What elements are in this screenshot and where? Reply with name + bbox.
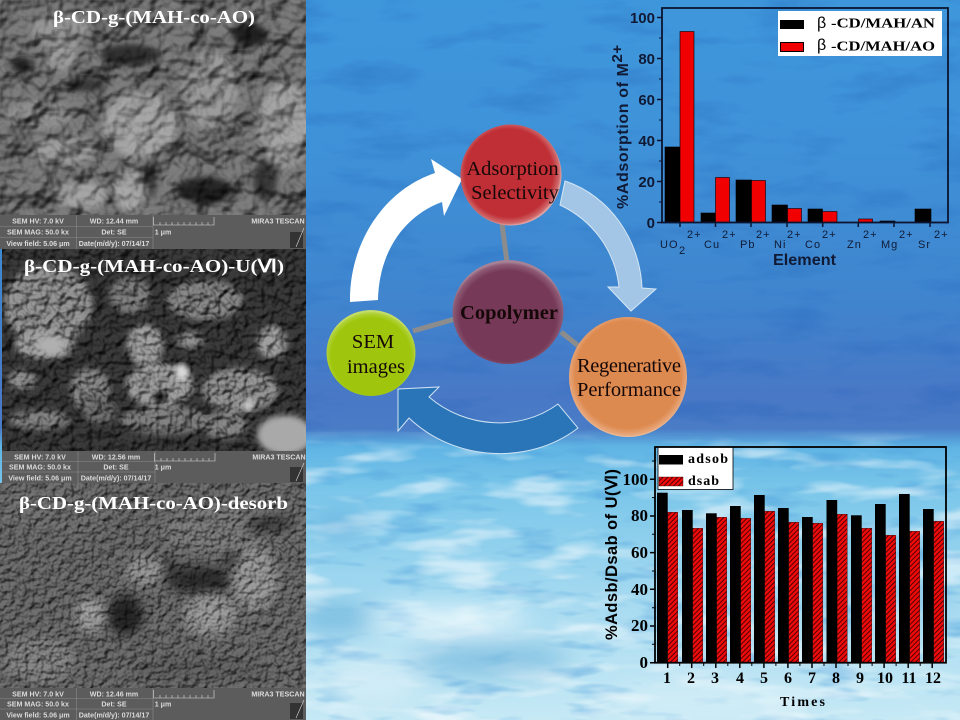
node: Regenerative Performance: Regenerative (577, 355, 681, 377)
SEM 3 title: β-CD-g-(MAH-co-AO)-desorb (19, 493, 288, 514)
chart 1 x axis title: Element (773, 252, 837, 269)
chart 1 legend: -CD/MAH/AO (831, 40, 935, 54)
SEM 1 info bar: SEM HV: 7.0 kV (12, 218, 64, 226)
SEM 1 info bar: WD: 12.44 mm (90, 218, 138, 226)
node: Copolymer: Copolymer (460, 302, 558, 324)
chart 1 y axis labels: 0 (647, 215, 655, 232)
chart 1 x axis labels (660, 229, 949, 257)
SEM 1 info bar: View field: 5.06 μm (6, 240, 70, 248)
SEM 2 info bar: SEM MAG: 50.0 kx (9, 464, 71, 472)
chart 1 y axis labels: 80 (638, 51, 655, 68)
SEM 2 info bar: WD: 12.56 mm (92, 454, 140, 462)
SEM 2 info bar: SEM HV: 7.0 kV (14, 454, 66, 462)
chart 2 x axis labels: 5 (760, 670, 768, 687)
chart 1 y axis labels (630, 10, 655, 232)
SEM 2 title: β-CD-g-(MAH-co-AO)-U(Ⅵ) (24, 256, 284, 277)
chart 1 x axis labels: 2 (679, 245, 686, 257)
SEM 2 info bar (2, 451, 306, 483)
chart 2 x axis labels (663, 670, 941, 687)
chart 1 legend: -CD/MAH/AN (831, 16, 935, 32)
node: SEM images: images (347, 356, 405, 378)
chart 2 y axis labels: 60 (631, 543, 648, 562)
chart 1 x axis labels: Sr (918, 239, 931, 251)
SEM 1 info bar: Date(m/d/y): 07/14/17 (79, 240, 149, 248)
SEM 3 info bar: Date(m/d/y): 07/14/17 (79, 712, 149, 720)
SEM 1 info bar: MIRA3 TESCAN (251, 218, 305, 226)
chart 1 x axis labels: 2+ (722, 229, 737, 241)
panel: SEM image 1 (0, 0, 311, 249)
arrow: adsorption selectivity to regenerative performance (560, 181, 656, 311)
SEM 2 info bar: View field: 5.06 μm (8, 474, 72, 482)
chart 2 x axis labels: 1 (663, 670, 671, 687)
chart 1 x axis labels: 2+ (863, 229, 878, 241)
panel: SEM image 2 (2, 249, 313, 483)
chart 2 x axis labels: 9 (856, 670, 864, 687)
chart 1 legend (778, 11, 942, 56)
SEM 3 info bar: SEM HV: 7.0 kV (12, 690, 64, 698)
chart 1 x axis labels: Zn (847, 239, 862, 251)
chart 2 adsorption bars (657, 493, 934, 663)
arrow: regenerative performance to SEM images (398, 387, 578, 454)
bar chart: adsorption of metal ions (609, 8, 949, 269)
chart 2 x axis labels: 8 (832, 670, 840, 687)
SEM 2 info bar: MIRA3 TESCAN (252, 454, 306, 462)
chart 1 legend: β (817, 37, 826, 54)
chart 2 x axis labels: 4 (736, 670, 744, 687)
bar chart: adsorption and desorption over 12 cycles (603, 447, 946, 710)
chart 2 x axis labels: 7 (808, 670, 816, 687)
chart 1 x axis labels: Ni (774, 239, 786, 251)
chart 1 y axis labels: 100 (630, 10, 655, 27)
chart 2 y axis labels (622, 470, 648, 672)
chart 1 x axis labels: 2+ (822, 229, 837, 241)
cycle diagram (326, 124, 687, 454)
chart 2 axes (650, 447, 946, 668)
panel: SEM image 3 (0, 483, 306, 720)
SEM 3 info bar: MIRA3 TESCAN (251, 690, 305, 698)
SEM 2 info bar: 1 μm (155, 464, 171, 472)
chart 2 y axis labels: 80 (631, 506, 648, 525)
chart 2 desorption bars (668, 511, 944, 663)
node: Copolymer (452, 260, 564, 364)
connector spokes (413, 224, 581, 348)
chart 2 x axis labels: 12 (925, 670, 941, 687)
node: SEM images (326, 310, 416, 396)
SEM 1 info bar (0, 215, 306, 249)
chart 2 y axis labels: 0 (640, 653, 648, 672)
chart 2 y axis labels: 20 (631, 616, 648, 635)
chart 1 y axis labels: 40 (638, 133, 655, 150)
chart 1 x axis labels: 2+ (899, 229, 914, 241)
node: Regenerative Performance: Performance (577, 379, 681, 401)
chart 2 y axis labels: 100 (622, 470, 648, 489)
chart 1 y axis title: 2+ (609, 44, 626, 63)
SEM 3 info bar: WD: 12.46 mm (90, 690, 138, 698)
chart 1 x axis labels: Mg (881, 239, 898, 251)
SEM 1 title: β-CD-g-(MAH-co-AO) (53, 7, 255, 28)
SEM 2 info bar: Date(m/d/y): 07/14/17 (81, 474, 151, 482)
node: Adsorption Selectivity: Selectivity (471, 182, 560, 204)
SEM 3 info bar: SEM MAG: 50.0 kx (7, 700, 69, 708)
chart 2 legend (658, 448, 733, 490)
node: Adsorption Selectivity: Adsorption (466, 158, 559, 180)
chart 1 axes (657, 8, 948, 227)
chart 1 x axis labels: Pb (740, 239, 755, 251)
SEM 2 info bar: Det: SE (103, 464, 129, 472)
chart 1 x axis labels: 2+ (934, 229, 949, 241)
chart 2 y axis title: %Adsb/Dsab of U(Ⅵ) (603, 469, 621, 640)
node: Regenerative Performance (569, 317, 687, 437)
chart 1 x axis labels: 2+ (687, 229, 702, 241)
chart 2 x axis labels: 6 (784, 670, 792, 687)
chart 1 y axis labels: 60 (638, 92, 655, 109)
chart 1 x axis labels: Co (805, 239, 821, 251)
arrow: SEM images to adsorption selectivity (350, 159, 462, 302)
SEM 3 info bar: Det: SE (101, 700, 127, 708)
SEM 1 info bar: Det: SE (101, 228, 127, 236)
SEM 1 info bar: SEM MAG: 50.0 kx (7, 228, 69, 236)
chart 2 legend: adsob (688, 452, 728, 467)
chart 2 x axis labels: 2 (687, 670, 695, 687)
SEM 1 info bar: 1 μm (155, 228, 171, 236)
SEM 3 info bar: View field: 5.06 μm (6, 712, 70, 720)
chart 1 x axis labels: 2+ (787, 229, 802, 241)
chart 1 x axis labels: Cu (704, 239, 720, 251)
chart 2 legend: dsab (688, 474, 719, 489)
chart 1 y axis labels: 20 (638, 174, 655, 191)
chart 2 x axis labels: 3 (711, 670, 719, 687)
chart 2 x axis labels: 10 (877, 670, 893, 687)
chart 1 x axis labels: 2+ (756, 229, 771, 241)
chart 1 bars (665, 32, 931, 222)
SEM 3 info bar: 1 μm (155, 700, 171, 708)
chart 2 y axis labels: 40 (631, 580, 648, 599)
chart 1 y axis title: %Adsorption of M (615, 63, 632, 209)
node: SEM images: SEM (352, 331, 394, 353)
chart 1 x axis labels: UO (660, 239, 678, 251)
node: Adsorption Selectivity (460, 124, 562, 226)
chart 2 x axis title: Times (780, 695, 826, 710)
chart 2 x axis labels: 11 (901, 670, 917, 687)
chart 1 legend: β (817, 15, 826, 32)
SEM 3 info bar (0, 688, 306, 720)
